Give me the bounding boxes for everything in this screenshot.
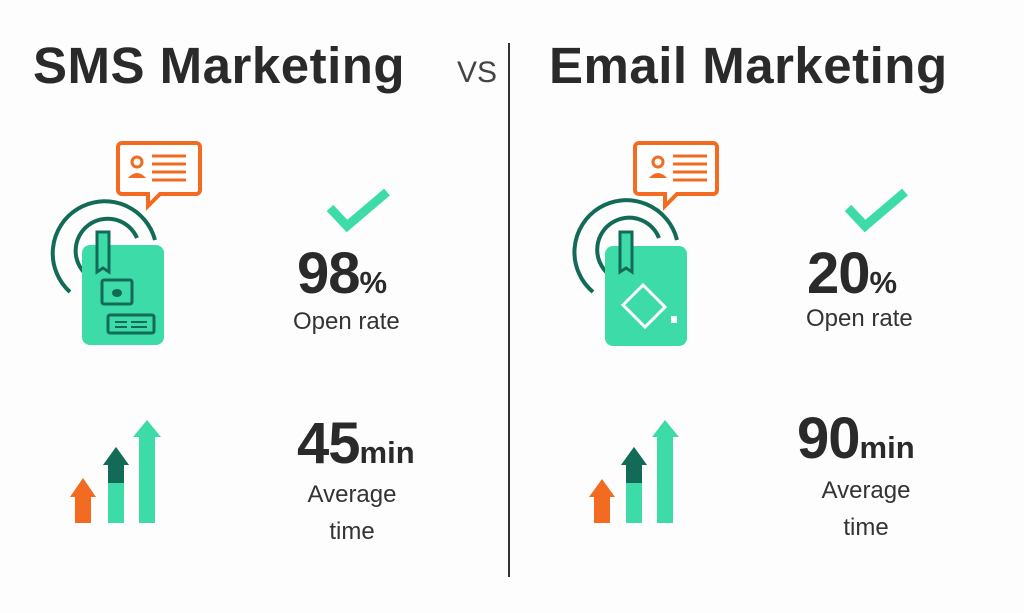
label: average time right: time	[843, 514, 889, 541]
label: average time right	[822, 477, 910, 541]
label: average time left: time	[329, 518, 375, 545]
stat: 20%: 20%	[807, 241, 897, 306]
stat: 90min: 90min	[797, 406, 915, 471]
title: SMS Marketing: SMS Marketing	[33, 37, 405, 94]
label: open rate right: Open rate	[806, 305, 913, 332]
label: average time right: Average	[822, 477, 910, 504]
label: average time left	[308, 481, 396, 545]
icon: SMS checkmark	[326, 188, 390, 232]
divider	[508, 43, 510, 577]
label: open rate: Open rate	[293, 308, 400, 335]
vs label: VS	[457, 56, 497, 89]
label: average time left: Average	[308, 481, 396, 508]
stat: 45min: 45min	[297, 411, 415, 476]
icon: email checkmark	[844, 188, 908, 232]
stat: 98%: 98%	[297, 241, 387, 306]
title: Email Marketing: Email Marketing	[549, 37, 948, 94]
